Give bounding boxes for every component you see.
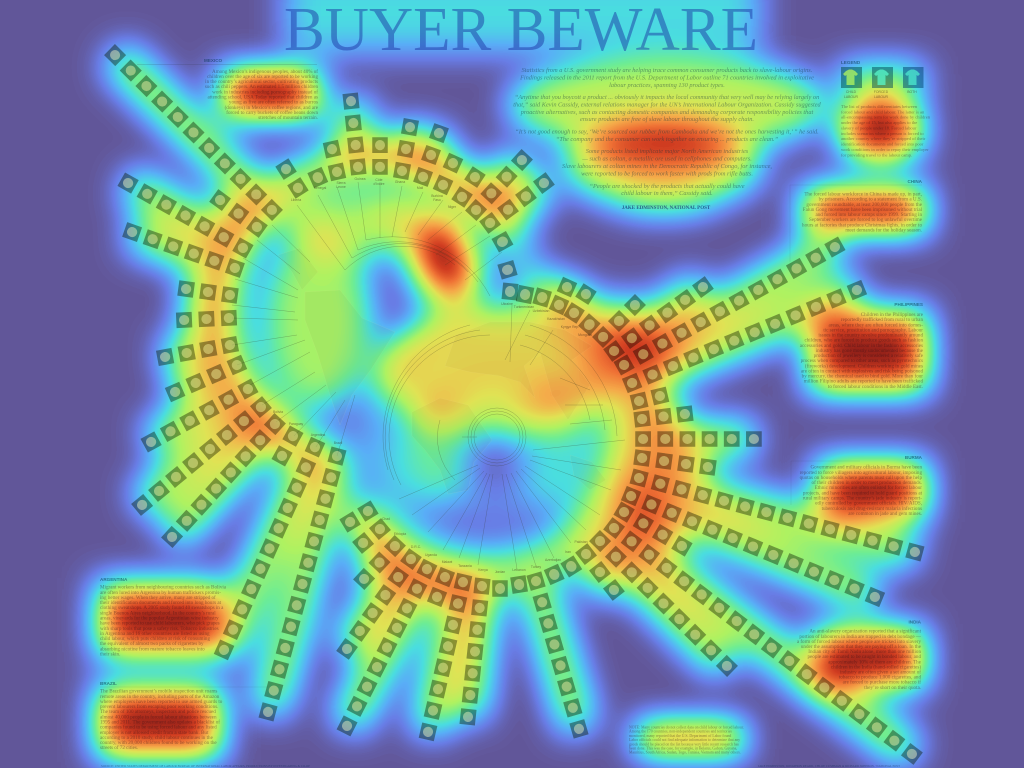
country labels on rings: Ethiopia [394, 532, 406, 536]
country labels on rings: Uzbekistan [533, 309, 549, 313]
intro text: “It’s not good enough to say, ‘We’re sourced our rubber from Cambodia and we’re not the ones harvesting it,’ ” he said. [515, 128, 819, 136]
panel: Mexico: in the country’s agricultural sector, cultivating products [205, 79, 318, 85]
panel: Burma: Government and military officials in Burma have been [810, 464, 922, 471]
panel: India [797, 620, 922, 691]
country labels on rings: Iran [565, 550, 571, 554]
country labels on rings: Ukraine [501, 302, 513, 306]
panel: China: and forced into labour camps since 1999. Starting in [815, 211, 922, 218]
panel: India: tobacco to produce 1,000 cigarettes, and [839, 675, 921, 681]
panel: Brazil: where employers have been reported to use armed guards to [100, 699, 223, 705]
panel: Philippines: are often in contact with explosives and risk being poisoned [801, 367, 923, 374]
panel: Philippines: children, who are forced to produce goods such as fashion [804, 337, 923, 344]
panel: Philippines: PHILIPPINES [894, 302, 923, 307]
intro text: child labour in them,” Cassidy said. [621, 190, 713, 197]
panel: Philippines: accessories and gold. Child labour in the fashion accessories [800, 342, 923, 349]
panel: Argentina: ARGENTINA [100, 577, 128, 582]
country labels on rings: Mongolia [578, 333, 592, 337]
panel: Philippines: industry has gone mostly undocumented because the [816, 348, 924, 354]
intro text: — such as coltan, a metallic ore used in cellphones and computers. [581, 156, 752, 162]
panel: China: hours at factories that produce Christmas lights, in order to [802, 221, 922, 228]
panel: Brazil: according to a 2010 study, child labour continues in the [100, 735, 214, 741]
intro text [513, 67, 822, 211]
panel: Burma: reported to force villagers into agricultural labour, imposing [800, 469, 922, 476]
panel: India: portion of labourers in India are trapped in debt bondage — [799, 633, 922, 640]
panel: Philippines [800, 302, 924, 390]
panel: Brazil: BRAZIL [100, 681, 117, 686]
panel: Burma: are common in jade and gem mines. [848, 511, 922, 517]
panel: Argentina: in Argentina and 16 other countries are listed as using [100, 631, 210, 637]
panel: Philippines: production of jewellery is considered a relatively safe [814, 352, 924, 359]
country labels on rings: Sierra [336, 181, 346, 185]
panel: Argentina [100, 577, 227, 657]
intro text: Findings released in the 2011 report from the U.S. Department of Labor outline 71 countries involved in exploitative [519, 74, 814, 82]
intro text: Statistics from a U.S. government study are helping trace common consumer products back to slave-labour origins. [522, 67, 812, 74]
country labels on rings: Kenya [478, 568, 488, 572]
icon tiles: upper circle spokes [115, 55, 544, 712]
panel: India: a form of forced labour where people are tricked into slavery [797, 638, 921, 645]
country labels on rings: Mali [417, 186, 423, 190]
panel: legend: BOTH [907, 90, 917, 94]
world map landmasses [278, 248, 606, 494]
country labels on rings: Turkmenistan [514, 305, 534, 309]
panel: Brazil: remote areas in the country, including parts of the Amazon [100, 693, 220, 700]
country labels on rings: Azerbaijan [545, 558, 561, 562]
panel: Burma: tuberculosis and drug-resistant malaria infections [822, 505, 922, 512]
panel: Argentina: their skin. [100, 651, 120, 657]
panel: Philippines: million Filipino adults are reported to have been trafficked [804, 378, 923, 385]
country labels on rings: Faso [433, 198, 441, 202]
panel: Philippines: Children in the Philippines are [861, 312, 924, 318]
panel: Mexico: children over the age of six are reported to be working [207, 73, 318, 80]
country labels on rings: Jordan [495, 570, 505, 574]
panel: India: under the assumption that they are paying off a loan. In the [801, 643, 922, 650]
panel: Philippines: (fireworks) development. Children working in gold mines [805, 362, 923, 369]
country labels on rings: Leone [336, 185, 346, 189]
country labels on rings: Niger [448, 205, 457, 209]
panel: legend [841, 60, 931, 157]
panel: legend: LEGEND [841, 60, 861, 65]
panel: legend: includes scenarios where a person is forced to [841, 131, 924, 136]
country labels on rings: d’Ivoire [374, 182, 385, 186]
note: Labor officials could not find adequate information to determine that any [629, 738, 740, 742]
panel: China: by prisoners. According to a statement from a U.S. [819, 196, 922, 203]
panel: China: Falun Gong movement have been imprisoned without trial [803, 207, 923, 213]
country labels on rings: Côte [375, 178, 383, 182]
intro text: were reported to be forced to work faster with prods from rifle butts. [581, 170, 753, 178]
upper circle leader lines [232, 182, 502, 456]
panel: Argentina: child labour, which puts children at risk of consuming [100, 635, 210, 642]
panel: legend: under the age of 15, but also applies to the [841, 120, 917, 126]
country labels on rings: Liberia [291, 198, 301, 202]
panel: China: The forced labour workforce in China is made up, in part, [804, 190, 922, 198]
panel: India: approximately 10% of them are children. The [828, 658, 922, 665]
note: Mauritius, South Africa, Sudan, Togo, Tunisia, Vietnam and many others. [629, 751, 741, 756]
panel: India: they’re short on their quota. [864, 685, 921, 691]
note: monitored, many reported that the U.S. Department of Labor found [629, 734, 731, 739]
intro text: Some products listed implicate major North American industries [586, 148, 749, 155]
panel: Burma: quotas on households where parents must call upon the help [800, 475, 922, 481]
source line: SOURCE: UNITED STATES DEPARTMENT OF LABOUR BUREAU OF INTERNATIONAL LABOR AFFAIRS, PRODUCTIONS BY INVESTIGATING & CO-OP [101, 764, 310, 768]
icon: forced labour shirt [872, 67, 893, 88]
panel: India: Indian city of Tamil Nadu alone, more than one million [808, 648, 921, 655]
note: been done. This was the case, for example, in Belarus, Gabon, Guyana, [629, 746, 737, 752]
panel: Philippines: to forced labour conditions in the Middle East. [828, 383, 923, 390]
panel: Argentina: absorbing nicotine from mature tobacco leaves into [100, 645, 205, 652]
country labels on rings: Pakistan [574, 540, 588, 544]
country labels on rings: Kyrgyz Rep. [561, 325, 579, 329]
panel: legend: LABOUR [844, 95, 859, 99]
country labels on rings: Guinea [355, 177, 366, 181]
panel: China: September workers are forced to log unlawful overtime [809, 216, 923, 223]
country labels on rings: Uganda [425, 553, 437, 557]
panel: Burma: Ethnic minorities are often enlisted for forced labour [815, 484, 922, 491]
intro text: ensure products are free of slave labour throughout the supply chain. [580, 116, 754, 123]
country labels on rings: Lebanon [512, 568, 526, 572]
country labels on rings: Paraguay [289, 422, 304, 426]
panel: China: meet demands for the holiday season. [845, 226, 922, 234]
country labels on rings: D.R.C. [411, 545, 421, 549]
country labels on rings: Ghana [395, 180, 405, 184]
panel: Argentina: clothing sweatshops. A 2005 study found 40 sweatshops in a [100, 604, 224, 611]
panel: Brazil: country, with 20,000 children found to be working on the [100, 739, 217, 746]
panel: legend: CHILD [846, 90, 857, 94]
panel: Argentina: are often lured into Argentina by human traffickers promis- [100, 589, 221, 596]
panel: India: children in the India (hand-rolled cigarettes) [831, 663, 921, 670]
note: NOTE: Many countries do not collect data on child labour or forced labour. [629, 726, 744, 730]
panel: Argentina: areas, vineyards for the popular Argentinian wine industry [100, 614, 219, 622]
country labels on rings: Tanzania [458, 564, 472, 568]
intro text: that,” said Kevin Cassidy, external relations manager for the UN’s International Labour Organization. Cassidy suggested [513, 102, 822, 108]
panel: Brazil: The team of 100 attorneys, inspectors and police rescued [100, 708, 216, 715]
panel: legend: another country where they’re stripped of their [841, 136, 926, 141]
panel: Brazil: employer is not allowed credit from a state bank. But [100, 729, 209, 736]
country labels on rings: Bolivia [273, 410, 283, 414]
intro text: JAKE EDMINSTON, NATIONAL POST [622, 206, 711, 211]
panel: Burma: BURMA [905, 455, 923, 460]
panel: India: industry are often given a set amount of [840, 668, 921, 676]
panel: Burma [791, 455, 923, 517]
intro text: labour practices, spanning 130 product types. [609, 82, 725, 89]
country labels on rings: Malawi [442, 560, 453, 564]
icon: child labour shirt [841, 67, 862, 88]
country labels on rings [273, 177, 592, 574]
panel: China: government roundtable, at least 200,000 people from the [806, 201, 923, 208]
panel: Brazil: The Brazilian government’s mobile inspection unit roams [100, 689, 217, 695]
panel: Mexico: MEXICO [204, 58, 223, 63]
panel: Argentina: their identification documents and forced into long hours at [100, 599, 222, 606]
panel: China: CHINA [907, 179, 923, 184]
note [629, 726, 744, 756]
country labels on rings: Chad [382, 517, 390, 521]
panel: legend: FORCED [874, 90, 889, 94]
panel: legend: identification documents and forced into poor [841, 142, 924, 146]
note: goods should be placed on the list because very little recent research has [629, 742, 739, 746]
panel: Argentina: single Buenos Aires neighborhood. In the country’s rural [100, 610, 216, 616]
panel: legend: LABOUR [874, 95, 889, 99]
panel: legend: for providing travel to the labour camp. [841, 152, 912, 157]
panel: Burma: edly controlled by government officials. HIV/AIDS, [815, 500, 922, 507]
panel: Argentina: with sharp tools that pose a safety risk. Tobacco industries [100, 625, 219, 632]
panel: Burma: of their children in order to meet production demands. [812, 479, 922, 486]
panel: Philippines: process when compared to other areas, such as pyrotechnics [801, 358, 923, 364]
intro text: “Anytime that you boycott a product ... obviously it impacts the local community that very well may be relying largely on [515, 94, 819, 101]
panel: Mexico: stretches of mountain terrain. [258, 114, 318, 121]
panel: legend: slavery of people under 18. Forced labour [841, 126, 917, 130]
country labels on rings: Argentina [311, 433, 325, 437]
credits: JAKE EDMINSTON, JONATHON REARD, CHLOE CUSHMAN & RICHARD JOHNSON / NATIONAL POST [758, 764, 900, 768]
panel: India: An anti-slavery organization reported that a significant [809, 628, 922, 635]
panel: Philippines: reportedly trafficked from rural to urban [841, 316, 923, 323]
panel: Mexico: Among Mexico’s indigenous peoples, about 40% of [212, 68, 318, 75]
intro text: “The company and the consumer can work together on ensuring ... products are clean.” [556, 136, 779, 143]
icon: both shirt [903, 67, 924, 88]
panel: Philippines: issues in the country revolve predominantly around [818, 332, 923, 338]
panel: Mexico: attending school, USA Today reported that children as [208, 94, 318, 100]
panel: Mexico: (donkeys) in Mexico’s coffee regions, and are [225, 104, 319, 111]
country labels on rings: Brazil [334, 441, 342, 445]
panel: legend: all-encompassing term for work done by children [841, 115, 931, 120]
panel: Mexico: work in industries including pornography instead of [212, 88, 318, 95]
panel: Burma: projects, and have been required to hold guard positions at [803, 490, 923, 496]
panel: Brazil: 1995 and 2011. The government also updates a blacklist of [100, 718, 220, 726]
panel: Philippines: tic service, prostitution and pornography. Labour [823, 327, 923, 333]
panel: Argentina: the equivalent of almost two packs of cigarettes by [100, 640, 204, 647]
panel: Argentina: Migrant workers from neighbouring countries such as Bolivia [100, 584, 227, 591]
intro text: Slave labourers at coltan mines in the Democratic Republic of Congo, for instance, [562, 163, 772, 170]
panel: Argentina: ing better wages. When they arrive, many are stripped of [100, 594, 216, 601]
country labels on rings: Kazakhstan [547, 317, 565, 321]
panel: India: people are estimated to be caught in bonded labour, and [807, 654, 921, 660]
panel: Mexico: forced to carry buckets of coffee beans down [226, 109, 318, 116]
panel: India: are forced to purchase more tobacco if [843, 679, 921, 686]
panel: legend: forced labour and child labour. The latter is an [841, 109, 925, 114]
intro text: proactive alternatives, such as contacting domestic companies and demanding corporate responsibility policies that [520, 109, 813, 116]
panel: Brazil: prevent labourers from escaping poor working conditions. [100, 703, 218, 710]
country labels on rings: Turkey [531, 565, 541, 569]
panel: Brazil [100, 681, 268, 751]
panel: Brazil: companies found to be using forced labour and any listed [100, 724, 217, 731]
panel: Philippines: areas, where they are often forced into domes- [829, 321, 923, 328]
intro text: “People are shocked by the products that actually could have [590, 183, 745, 190]
note: Among the 170 countries, non-independent countries and territories [629, 730, 732, 735]
panel: legend: work conditions in order to repay their employer [841, 147, 929, 152]
panel: Mexico: such as chili peppers. An estimated 1.5 million children [205, 84, 318, 90]
panel: China [790, 179, 923, 262]
country labels on rings: Burkina [431, 194, 443, 198]
panel: Mexico: young as five are often referred to as burros [229, 99, 318, 106]
panel: legend: The list of products differentiates between [841, 104, 918, 109]
panel: Brazil: streets of 72 cities. [100, 744, 138, 751]
panel: India: INDIA [908, 620, 922, 624]
panel: Mexico [137, 58, 319, 121]
panel: Burma: rural military camps. The country’s jade industry is report- [803, 496, 922, 502]
icon tiles: main circle spokes [347, 247, 915, 754]
country labels on rings: Senegal [314, 186, 326, 190]
panel: Brazil: almost 40,000 people in forced labour situations between [100, 713, 217, 720]
leader lines and concentric arcs [383, 305, 625, 569]
panel: Philippines: by mercury, the chemical used to bind gold. More than four [802, 373, 923, 380]
panel: Argentina: have been reported to use child labourers, who pick grapes [100, 621, 220, 627]
